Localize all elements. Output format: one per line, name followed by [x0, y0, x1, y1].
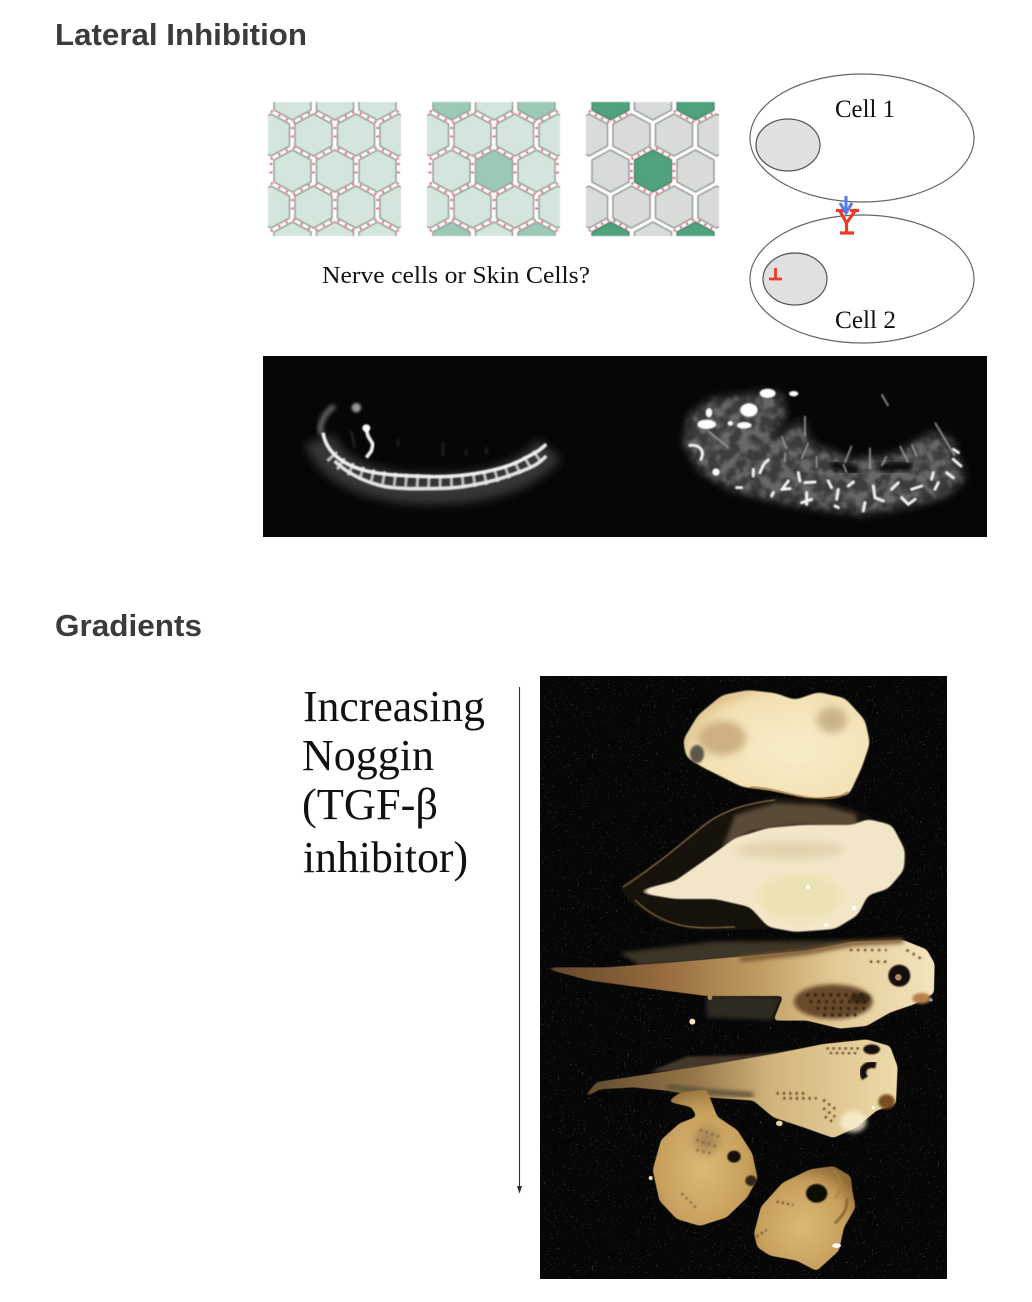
icon: red nuclear repressor	[769, 268, 782, 279]
panel: hexagon cell sheets	[268, 101, 720, 237]
hexagon grid: nerve cell selected	[586, 101, 720, 237]
caption: Nerve cells or Skin Cells?: Nerve cells or Skin Cells?	[322, 263, 590, 289]
embryo: disrupted staining	[685, 389, 965, 514]
hexagon grid: emerging difference	[426, 102, 560, 236]
icon: blue ligand arrow	[840, 196, 852, 213]
text block: Increasing Noggin (TGF-β inhibitor): (TGF-β	[302, 780, 438, 829]
embryo 5: tailless with eye	[649, 1089, 758, 1226]
arrow: increasing dose	[518, 687, 522, 1192]
cell 1: Cell 1	[835, 96, 895, 123]
text block: Increasing Noggin (TGF-β inhibitor): Increasing	[303, 682, 485, 731]
photo: noggin dose series of embryos	[540, 676, 947, 1279]
embryo 6: tailless with cavity	[754, 1166, 856, 1271]
embryo 1: head only	[683, 690, 870, 799]
embryo: ordered staining	[320, 403, 550, 489]
text block: Increasing Noggin (TGF-β inhibitor): Noggin	[302, 731, 434, 780]
text block: Increasing Noggin (TGF-β inhibitor)	[302, 682, 485, 882]
tadpole 4: small head	[582, 1039, 898, 1138]
embryo 2: large head with fin	[619, 797, 907, 933]
tadpole 3: normal axis	[540, 940, 935, 1029]
micrograph: fluorescent embryos	[263, 356, 987, 537]
heading: Gradients: Gradients	[55, 608, 202, 643]
cell 2: Cell 2	[835, 307, 896, 334]
icon: red receptor	[836, 210, 859, 233]
hexagon grid: uniform cells	[268, 102, 402, 236]
cell 2	[750, 215, 974, 343]
text block: Increasing Noggin (TGF-β inhibitor): inhibitor)	[303, 833, 468, 882]
cell 1	[750, 74, 974, 202]
heading: Lateral Inhibition: Lateral Inhibition	[55, 17, 307, 52]
diagram: two signalling cells	[750, 74, 974, 343]
